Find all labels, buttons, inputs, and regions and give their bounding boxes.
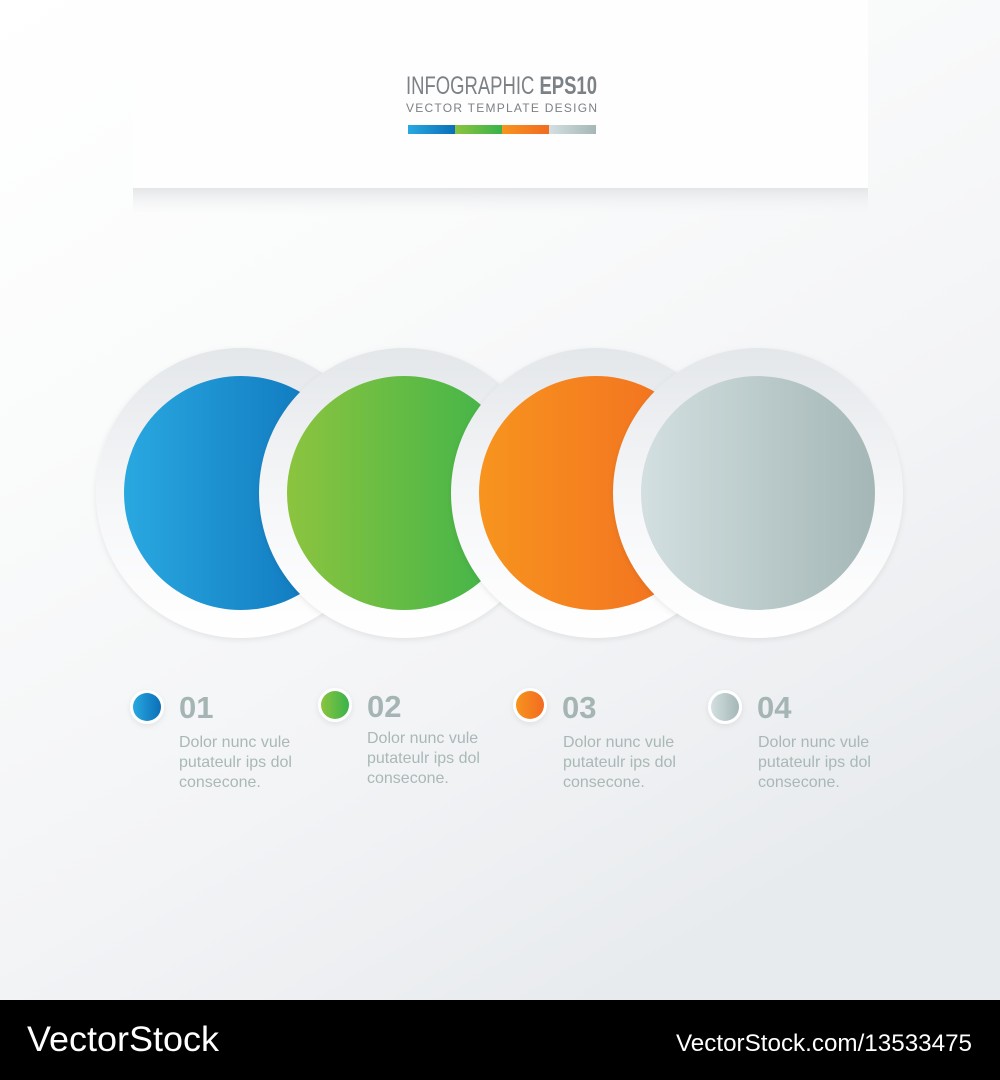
legend item 01: consecone. — [179, 774, 261, 791]
legend item 02 — [318, 688, 480, 787]
legend item 02: consecone. — [367, 770, 449, 787]
legend item 03: consecone. — [563, 774, 645, 791]
legend item 03 — [513, 688, 676, 791]
circle 4 gray — [613, 348, 903, 638]
header panel — [133, 0, 868, 216]
legend item 01: Dolor nunc vule — [179, 734, 290, 751]
circles chain — [96, 348, 903, 638]
legend item 03: 03 — [562, 690, 596, 725]
legend item 04 — [708, 690, 871, 791]
legend item 01: putateulr ips dol — [179, 754, 292, 771]
footer bar: VectorStock — [27, 1020, 220, 1059]
legend item 02: Dolor nunc vule — [367, 730, 478, 747]
legend item 04: 04 — [757, 690, 792, 725]
legend item 02: 02 — [367, 689, 401, 724]
legend item 03: Dolor nunc vule — [563, 734, 674, 751]
title: INFOGRAPHIC EPS10 — [406, 72, 597, 100]
legend item 04: consecone. — [758, 774, 840, 791]
circle 2 green — [259, 348, 549, 638]
footer bar: VectorStock.com/13533475 — [676, 1030, 972, 1057]
footer bar — [0, 1000, 1000, 1080]
legend item 02: putateulr ips dol — [367, 750, 480, 767]
legend item 01: 01 — [179, 690, 213, 725]
color bar — [408, 125, 596, 134]
legend item 04: Dolor nunc vule — [758, 734, 869, 751]
subtitle: VECTOR TEMPLATE DESIGN — [406, 101, 597, 115]
legend item 01 — [130, 690, 292, 791]
circle 1 blue — [96, 348, 386, 638]
legend item 03: putateulr ips dol — [563, 754, 676, 771]
circle 3 orange — [451, 348, 741, 638]
legend item 04: putateulr ips dol — [758, 754, 871, 771]
